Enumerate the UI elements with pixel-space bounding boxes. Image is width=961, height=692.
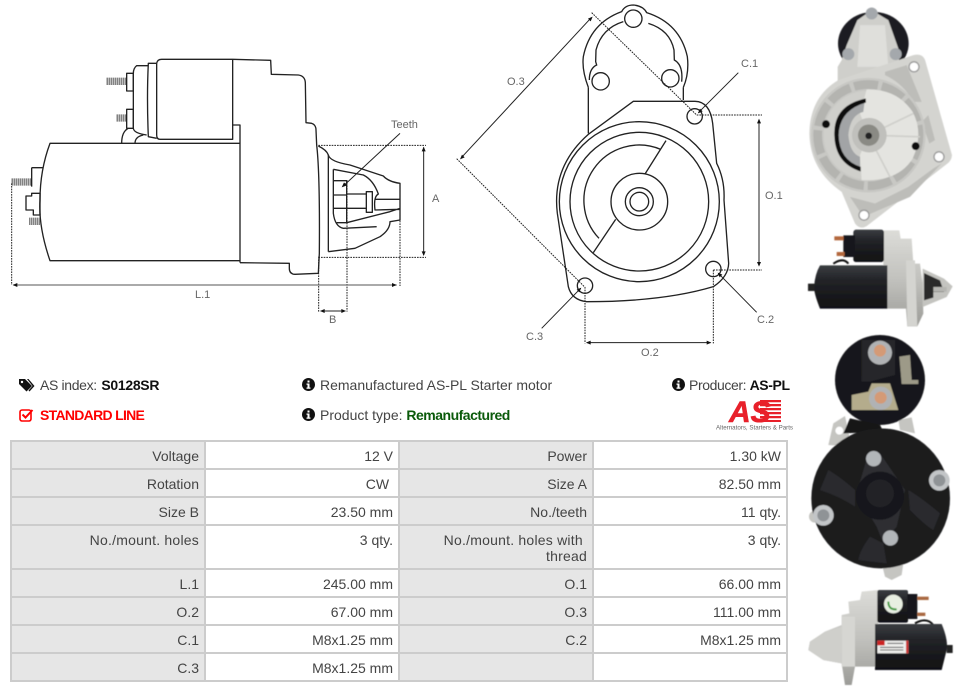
wire harness <box>843 418 883 433</box>
label: C.2: C.2 <box>757 314 774 326</box>
icon: info <box>302 378 315 391</box>
starter housing outline <box>157 59 319 274</box>
motor body <box>40 125 240 263</box>
AS logo <box>716 396 793 432</box>
row: O.2 / O.3: 111.00 mm <box>713 604 781 620</box>
row: mounting holes: 3 qty. <box>748 532 781 548</box>
rear cap outline <box>583 5 688 87</box>
label: O.2: O.2 <box>641 347 659 359</box>
row: rotation / size A: CW <box>366 476 389 492</box>
icon: info <box>672 378 685 391</box>
drive nose <box>318 146 400 252</box>
row: L.1 / O.1 <box>12 570 786 596</box>
light pie section <box>860 89 918 180</box>
threaded studs <box>12 81 127 221</box>
row: L.1 / O.1: 66.00 mm <box>719 576 781 592</box>
row: C.1 / C.2: C.2 <box>565 632 587 648</box>
mounting ears <box>828 416 852 447</box>
flange pockets <box>850 65 942 217</box>
drive housing <box>808 590 878 685</box>
row: size B / teeth: 11 qty. <box>741 504 781 520</box>
mounting flange <box>557 101 729 302</box>
AS logo: Alternators, Starters & Parts <box>716 424 793 432</box>
row: voltage / power: 12 V <box>364 448 393 464</box>
flywheel pocket <box>835 98 865 170</box>
nose <box>923 269 953 307</box>
row: rotation / size A <box>12 470 786 496</box>
motor end cap <box>811 428 950 568</box>
product type: Product type: Remanufactured <box>320 407 510 423</box>
row: size B / teeth: Size B <box>159 504 199 520</box>
row: C.1 / C.2: M8x1.25 mm <box>312 632 393 648</box>
terminals <box>26 73 143 215</box>
dimension lines <box>457 13 762 343</box>
row: mounting holes: No./mount. holes <box>90 532 199 548</box>
row: size B / teeth: 23.50 mm <box>331 504 393 520</box>
solenoid <box>853 230 884 262</box>
row: rotation / size A: Rotation <box>147 476 199 492</box>
photo: rear view <box>808 334 951 580</box>
specification table <box>10 440 788 682</box>
label: Teeth: Teeth <box>391 119 418 131</box>
row: voltage / power: Power <box>547 448 587 464</box>
row: mounting holes: 3 qty. <box>360 532 393 548</box>
rear black cap <box>838 12 909 75</box>
photo: side view <box>807 228 953 327</box>
row: rotation / size A: Size A <box>547 476 587 492</box>
row: voltage / power: Voltage <box>152 448 199 464</box>
nose <box>584 141 666 253</box>
drive housing <box>883 230 923 326</box>
side view line drawing <box>11 58 426 313</box>
row: C.3 <box>12 654 786 680</box>
photo: front flange view <box>809 7 952 228</box>
row: L.1 / O.1: 245.00 mm <box>323 576 393 592</box>
row: L.1 / O.1: O.1 <box>564 576 587 592</box>
row: voltage / power <box>12 442 786 468</box>
row: mounting holes: thread <box>546 548 587 564</box>
solenoid cap <box>835 335 925 425</box>
row: size B / teeth: No./teeth <box>530 504 587 520</box>
solenoid body <box>133 59 233 139</box>
row: mounting holes: No./mount. holes with <box>444 532 583 548</box>
photo: side view mirrored <box>808 589 954 686</box>
row: O.2 / O.3: O.2 <box>176 604 199 620</box>
motor body <box>814 265 887 309</box>
row: rotation / size A: 82.50 mm <box>719 476 781 492</box>
label: O.1: O.1 <box>765 190 783 202</box>
bolt holes <box>687 109 702 124</box>
icon: info <box>302 408 315 421</box>
icon: tags <box>19 379 34 392</box>
bracket <box>838 10 900 82</box>
row: C.3: C.3 <box>177 660 199 676</box>
label: C.3: C.3 <box>526 331 543 343</box>
AS logo: AS <box>728 396 771 429</box>
front view line drawing <box>456 4 762 345</box>
row: voltage / power: 1.30 kW <box>730 448 781 464</box>
motor body <box>875 624 947 670</box>
row: C.1 / C.2: M8x1.25 mm <box>700 632 781 648</box>
row: mounting holes <box>12 526 786 568</box>
AS index: AS index: S0128SR <box>40 377 159 393</box>
product description: Remanufactured AS-PL Starter motor <box>320 377 552 393</box>
standard line badge: STANDARD LINE <box>40 407 144 423</box>
row: C.3: M8x1.25 mm <box>312 660 393 676</box>
row: C.1 / C.2: C.1 <box>177 632 199 648</box>
dimension lines <box>12 145 426 312</box>
producer: Producer: AS-PL <box>689 377 790 393</box>
label: A: A <box>432 193 439 205</box>
flange <box>809 55 952 228</box>
label: C.1: C.1 <box>741 58 758 70</box>
label: L.1: L.1 <box>195 289 210 301</box>
row: C.1 / C.2 <box>12 626 786 652</box>
icon: check square <box>19 409 34 422</box>
product label <box>877 641 908 653</box>
label: O.3: O.3 <box>507 76 525 88</box>
row: size B / teeth <box>12 498 786 524</box>
row: O.2 / O.3: 67.00 mm <box>331 604 393 620</box>
solenoid <box>877 590 908 623</box>
label: B: B <box>329 314 336 326</box>
row: L.1 / O.1: L.1 <box>180 576 199 592</box>
row: O.2 / O.3: O.3 <box>564 604 587 620</box>
row: O.2 / O.3 <box>12 598 786 624</box>
